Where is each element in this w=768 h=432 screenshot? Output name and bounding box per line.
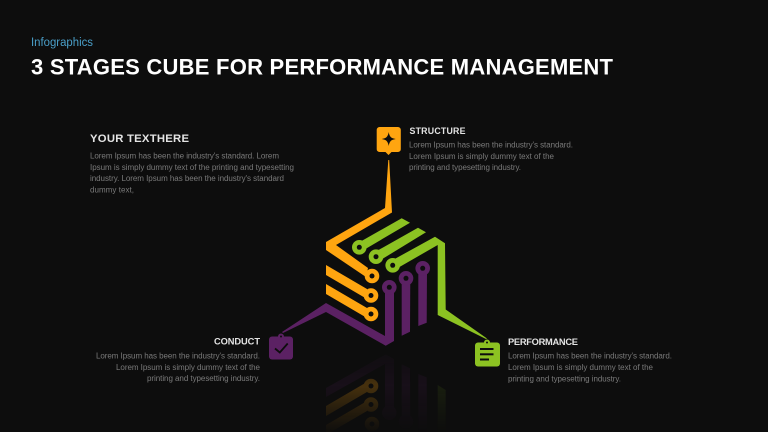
text block: performance <box>508 337 672 384</box>
text block: structure: Lorem Ipsum is simply dummy text of the <box>409 152 555 161</box>
text block: structure <box>409 126 573 172</box>
subtitle: Infographics: Infographics <box>31 37 93 49</box>
text block: performance: Lorem Ipsum has been the industry's standard. <box>508 352 672 360</box>
text block: structure: STRUCTURE <box>410 126 466 136</box>
icon: performance clipboard <box>475 340 500 366</box>
text block: structure: Lorem Ipsum has been the industry's standard. <box>409 140 573 150</box>
text block: conduct: Lorem Ipsum is simply dummy text of the <box>116 363 261 372</box>
text block: conduct: CONDUCT <box>214 336 260 346</box>
text block: performance: Lorem Ipsum is simply dummy text of the <box>508 363 654 372</box>
text block: your text here: Lorem Ipsum has been the industry's standard. Lorem <box>90 152 279 160</box>
orange stage <box>326 160 392 321</box>
text block: your text here: Ipsum is simply dummy text of the printing and typesetting <box>90 163 294 172</box>
text block: performance: printing and typesetting industry. <box>508 374 621 384</box>
text block: your text here <box>90 133 294 194</box>
purple stage <box>282 261 430 346</box>
title: 3 STAGES CUBE FOR PERFORMANCE MANAGEMENT <box>31 54 614 80</box>
icon: structure star <box>377 127 401 155</box>
text block: your text here: industry. Lorem Ipsum has been the industry's standard <box>90 174 284 183</box>
cube reflection <box>326 373 446 426</box>
green stage <box>352 218 487 339</box>
circuit cube <box>282 160 487 346</box>
icon: conduct checklist <box>269 334 293 360</box>
text block: performance: PERFORMANCE <box>508 337 578 347</box>
text block: conduct <box>96 336 261 383</box>
text block: conduct: Lorem Ipsum has been the industry's standard. <box>96 352 260 360</box>
text block: your text here: YOUR TEXTHERE <box>90 133 189 145</box>
text block: your text here: dummy text, <box>90 186 134 194</box>
text block: conduct: printing and typesetting industry. <box>147 374 260 383</box>
text block: structure: printing and typesetting industry. <box>409 163 521 172</box>
